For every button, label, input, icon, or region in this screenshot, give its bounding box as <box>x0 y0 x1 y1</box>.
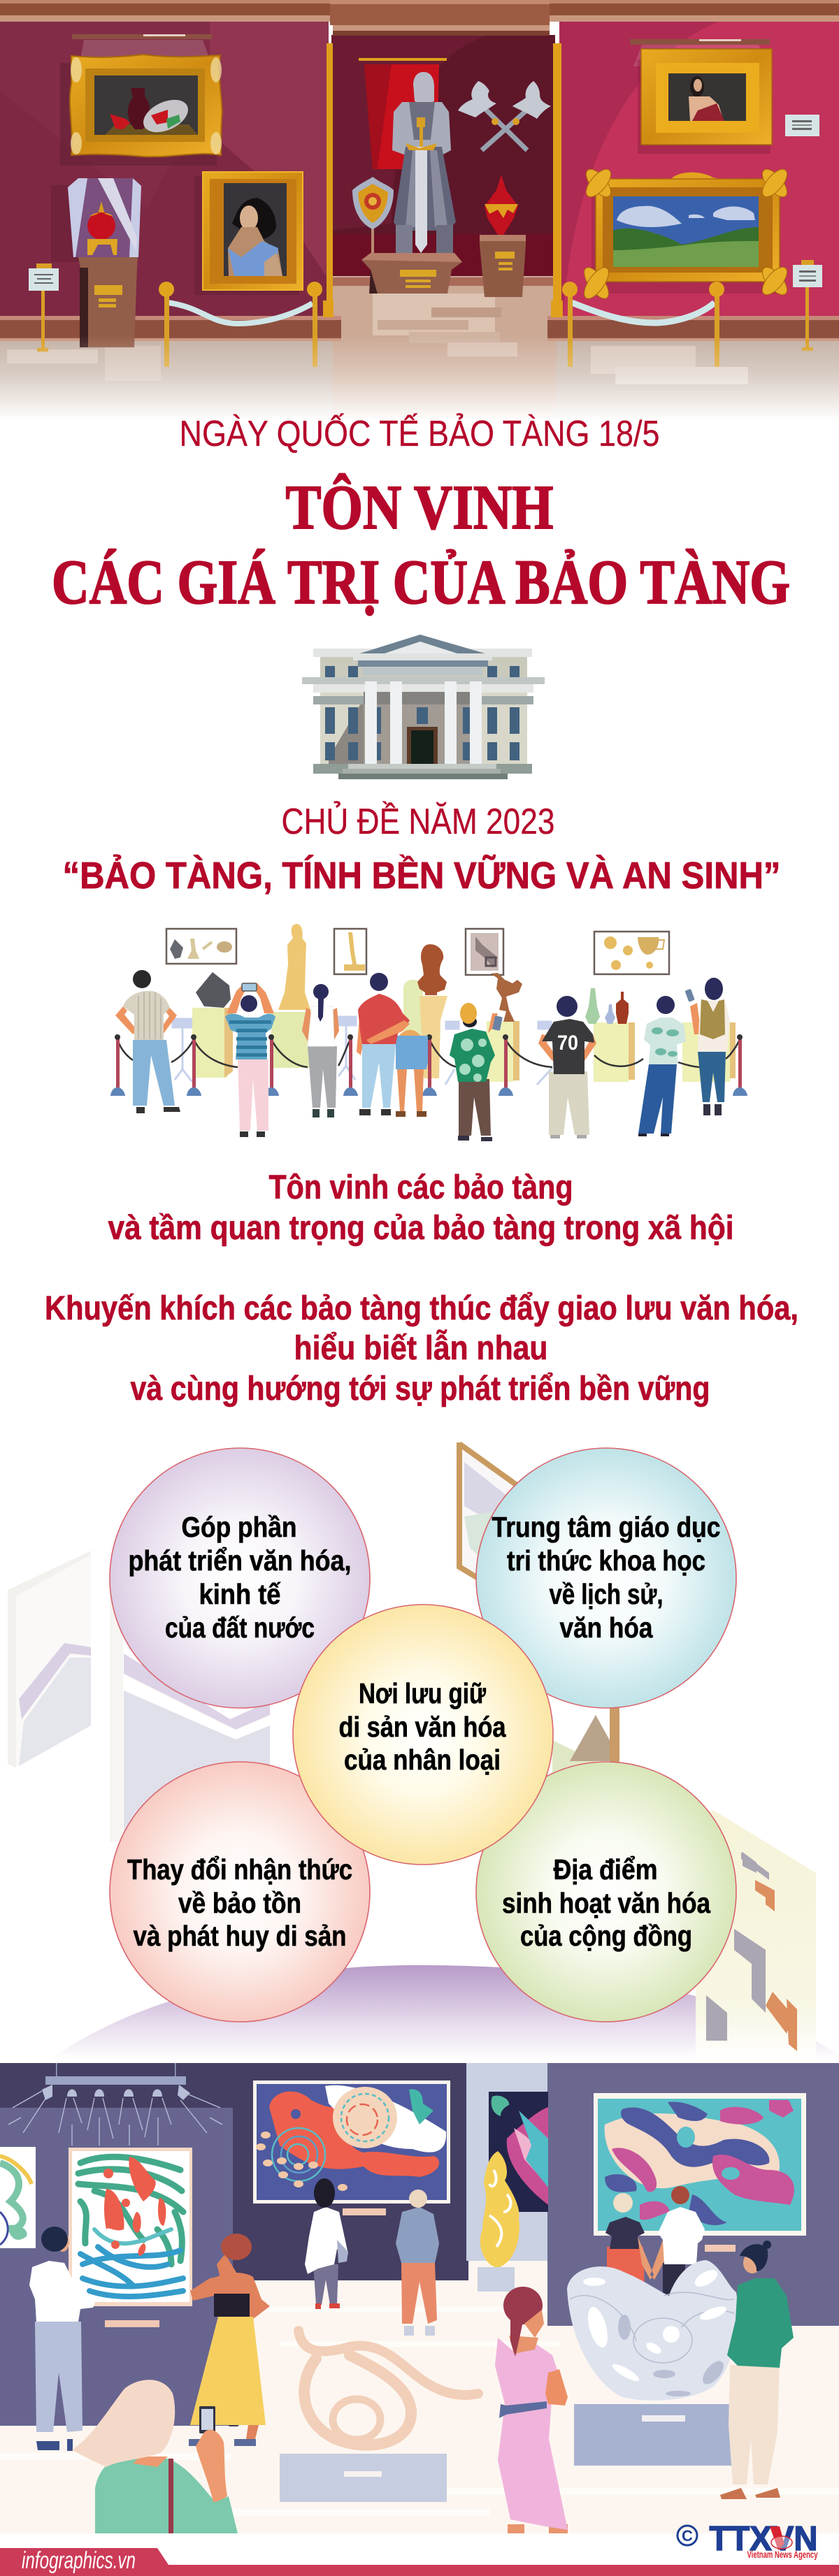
info sign right bottom <box>793 260 822 351</box>
circle: heritage keeper (centre) <box>293 1605 553 1865</box>
visitor 2 <box>225 983 275 1137</box>
circle: heritage keeper (centre): của nhân loại <box>344 1744 501 1776</box>
faint left panel <box>8 1551 91 1768</box>
man in white shirt <box>29 2227 95 2451</box>
theme title: “BẢO TÀNG, TÍNH BỀN VỮNG VÀ AN SINH” <box>63 855 780 897</box>
dark painting <box>489 2092 548 2212</box>
discus statue <box>491 973 522 1022</box>
text block: first statement: và tầm quan trọng của bảo tàng trong xã hội <box>108 1210 734 1247</box>
floor side <box>0 321 839 420</box>
circle: education centre: tri thức khoa học <box>507 1544 705 1577</box>
wooden frame <box>457 1442 524 1581</box>
circle: contribution to culture and economy: Góp phần <box>182 1511 296 1543</box>
swirl pedestal <box>280 2454 447 2502</box>
far-left painting <box>0 2147 36 2248</box>
logo: copyright mark <box>677 2526 697 2545</box>
visitor 8: leaf shirt <box>638 996 686 1136</box>
title: TÔN VINH <box>285 472 554 542</box>
rope barrier left <box>159 282 322 367</box>
circle: contribution to culture and economy: kinh tế <box>199 1578 281 1610</box>
circle: education centre: về lịch sử, <box>550 1578 663 1610</box>
heading: date line: NGÀY QUỐC TẾ BẢO TÀNG 18/5 <box>179 413 660 454</box>
panel: background gallery shapes behind circles <box>8 1442 839 2060</box>
man in green sweater <box>720 2241 794 2499</box>
panel: museum hall hero illustration <box>0 0 839 421</box>
painting: green-red strokes <box>69 2148 192 2306</box>
visitor 7: number 70 shirt: 70 <box>557 1032 578 1055</box>
circle: changing awareness: Thay đổi nhận thức <box>127 1853 352 1886</box>
light rig <box>8 2063 222 2146</box>
frame corner ornaments <box>71 57 222 154</box>
centre niche <box>331 35 555 276</box>
stanchion posts <box>116 1036 742 1088</box>
circle: community venue <box>476 1762 736 2022</box>
painting: portrait of man <box>638 49 772 154</box>
visitor 3 <box>302 984 339 1117</box>
vases <box>585 988 629 1024</box>
red vase and pedestal <box>480 175 526 297</box>
text block: second statement <box>45 1290 798 1408</box>
circle: contribution to culture and economy <box>110 1448 370 1708</box>
left wall light beam <box>210 21 329 280</box>
floor tiles <box>7 294 748 384</box>
circle: heritage keeper (centre): di sản văn hóa <box>338 1711 506 1743</box>
panel: gallery visitors illustration <box>0 2063 839 2544</box>
visitor 1 <box>115 970 180 1113</box>
lamp right <box>630 39 770 66</box>
pedestal knight <box>361 253 462 294</box>
silver sculpture <box>567 2260 738 2401</box>
left wall panel <box>0 2108 233 2426</box>
visitor 7: number 70 shirt <box>538 996 596 1138</box>
display case with egg <box>51 178 141 347</box>
knight armour <box>392 72 456 253</box>
left wall mid tone <box>0 21 210 210</box>
white fade into page <box>0 335 839 421</box>
circle: contribution to culture and economy: phát triển văn hóa, <box>129 1544 351 1577</box>
left wall <box>0 21 329 321</box>
panel: white footer strip <box>0 2533 839 2576</box>
left skirting top line <box>0 316 341 320</box>
title <box>52 472 790 617</box>
logo: TTXVN: TTXVN <box>709 2520 818 2558</box>
top mouldings <box>0 0 839 36</box>
niche lower band <box>331 234 555 276</box>
corner ornaments <box>580 166 791 303</box>
grey rock <box>196 972 231 1008</box>
visitor 6: tropical shirt <box>450 1003 503 1141</box>
niche light arc <box>331 35 489 231</box>
painting: woman in blue <box>194 172 303 295</box>
right wall panel <box>547 2063 839 2326</box>
circle: changing awareness: và phát huy di sản <box>133 1920 347 1952</box>
circle: changing awareness <box>110 1762 370 2022</box>
visitor 5: denim shorts <box>396 1030 428 1117</box>
label plate <box>343 2208 386 2215</box>
wall frames <box>166 929 669 975</box>
mid gap wall <box>466 2063 547 2261</box>
right skirting bottom line <box>547 338 839 341</box>
silver sculpture pedestal <box>574 2404 733 2466</box>
label plate right <box>705 2245 736 2252</box>
painting: landscape <box>580 166 791 303</box>
visitor 9: vest <box>685 978 730 1115</box>
right wall <box>559 21 839 321</box>
painting: still life <box>60 55 222 166</box>
floor <box>0 2063 839 2533</box>
floor planks <box>0 2306 839 2516</box>
arc floor <box>49 1965 839 2060</box>
faint centre-left block <box>110 1593 270 1845</box>
rope barrier right <box>562 282 724 367</box>
globe mark <box>770 2526 792 2550</box>
niche skirting <box>331 277 557 286</box>
left skirting <box>0 320 341 338</box>
info sign left <box>29 263 59 352</box>
stanchion caps <box>115 1034 743 1040</box>
theme label: CHỦ ĐỀ NĂM 2023 <box>281 801 555 842</box>
lamp and glass over painting 1 <box>72 34 212 59</box>
floor centre <box>333 276 557 420</box>
circle: education centre <box>476 1448 736 1708</box>
left skirting bottom line <box>0 338 341 341</box>
gold sculpture <box>480 2151 519 2268</box>
golden statue <box>278 924 310 1010</box>
logo: copyright mark: C <box>682 2527 693 2545</box>
circle: heritage keeper (centre): Nơi lưu giữ <box>359 1677 486 1709</box>
stanchion ropes <box>117 1039 740 1067</box>
illustration: visitors at exhibition <box>110 924 747 1141</box>
gold pillars <box>323 43 563 317</box>
easel post and brown triangle <box>552 1708 619 1789</box>
info sign right top <box>785 115 819 136</box>
woman in yellow skirt <box>189 2234 270 2446</box>
label plate left <box>105 2320 159 2327</box>
peach swirl sculpture <box>299 2331 478 2445</box>
visitor 4: red shirt <box>357 973 410 1115</box>
circle: changing awareness: về bảo tồn <box>178 1887 301 1919</box>
circle: education centre: văn hóa <box>559 1612 654 1644</box>
text block: first statement <box>108 1169 734 1247</box>
painting: red blob abstract <box>253 2081 450 2204</box>
man in grey hoodie <box>396 2190 439 2336</box>
text block: second statement: và cùng hướng tới sự phát triển bền vững <box>130 1370 710 1408</box>
right skirting <box>547 320 839 338</box>
gold sculpture pedestal <box>478 2267 515 2292</box>
faint right panel with maze pattern <box>696 1810 816 2060</box>
banner <box>359 58 447 169</box>
woman in pink dress <box>495 2287 568 2533</box>
right skirting top line <box>547 316 839 320</box>
two visitors at painting <box>605 2186 705 2296</box>
circle: community venue: sinh hoạt văn hóa <box>502 1887 711 1919</box>
circle: community venue: Địa điểm <box>554 1853 657 1886</box>
icon: museum building <box>302 635 545 779</box>
lavender label stands <box>173 1017 552 1085</box>
back wall dark <box>0 2063 468 2280</box>
plinths <box>192 980 736 1082</box>
circle: community venue: của cộng đồng <box>520 1920 692 1952</box>
woman in white coat <box>305 2178 348 2309</box>
blonde woman with phone <box>72 2380 238 2544</box>
shield <box>352 177 394 254</box>
text block: first statement: Tôn vinh các bảo tàng <box>268 1169 573 1206</box>
painting: teal blobs <box>594 2093 806 2236</box>
circle: contribution to culture and economy: của đất nước <box>165 1612 315 1644</box>
footer bar <box>0 2548 839 2576</box>
circle: education centre: Trung tâm giáo dục <box>492 1511 720 1543</box>
terracotta bust <box>417 944 447 995</box>
footer site name: infographics.vn <box>22 2547 136 2574</box>
text block: second statement: hiểu biết lẫn nhau <box>294 1329 548 1367</box>
right wall shadow arc <box>559 21 720 321</box>
crossed axes <box>458 81 551 150</box>
stanchion bases <box>110 1087 747 1096</box>
